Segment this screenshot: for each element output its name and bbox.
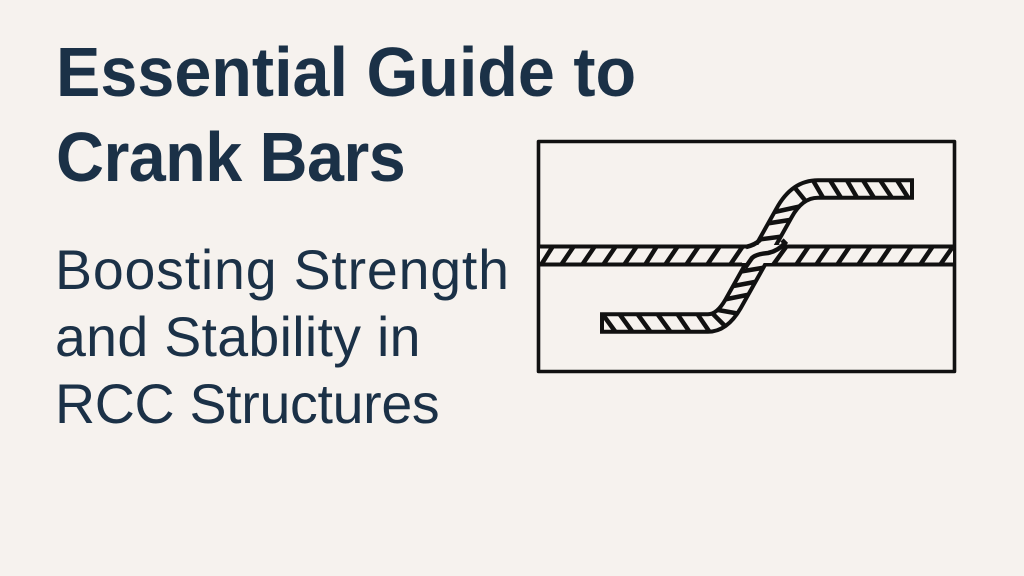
subtitle: RCC Structures (55, 373, 439, 435)
diagram: crank bar in frame (536, 140, 956, 374)
title (56, 33, 636, 196)
title: Crank Bars (56, 118, 405, 196)
cranked bar (600, 177, 914, 334)
hatching on crank (601, 177, 909, 334)
frame (538, 142, 954, 372)
title: Essential Guide to (56, 33, 636, 111)
crossing twist (742, 245, 785, 263)
main straight bar (538, 246, 954, 265)
subtitle: and Stability in (55, 306, 421, 368)
subtitle (55, 239, 510, 435)
subtitle: Boosting Strength (55, 239, 510, 301)
